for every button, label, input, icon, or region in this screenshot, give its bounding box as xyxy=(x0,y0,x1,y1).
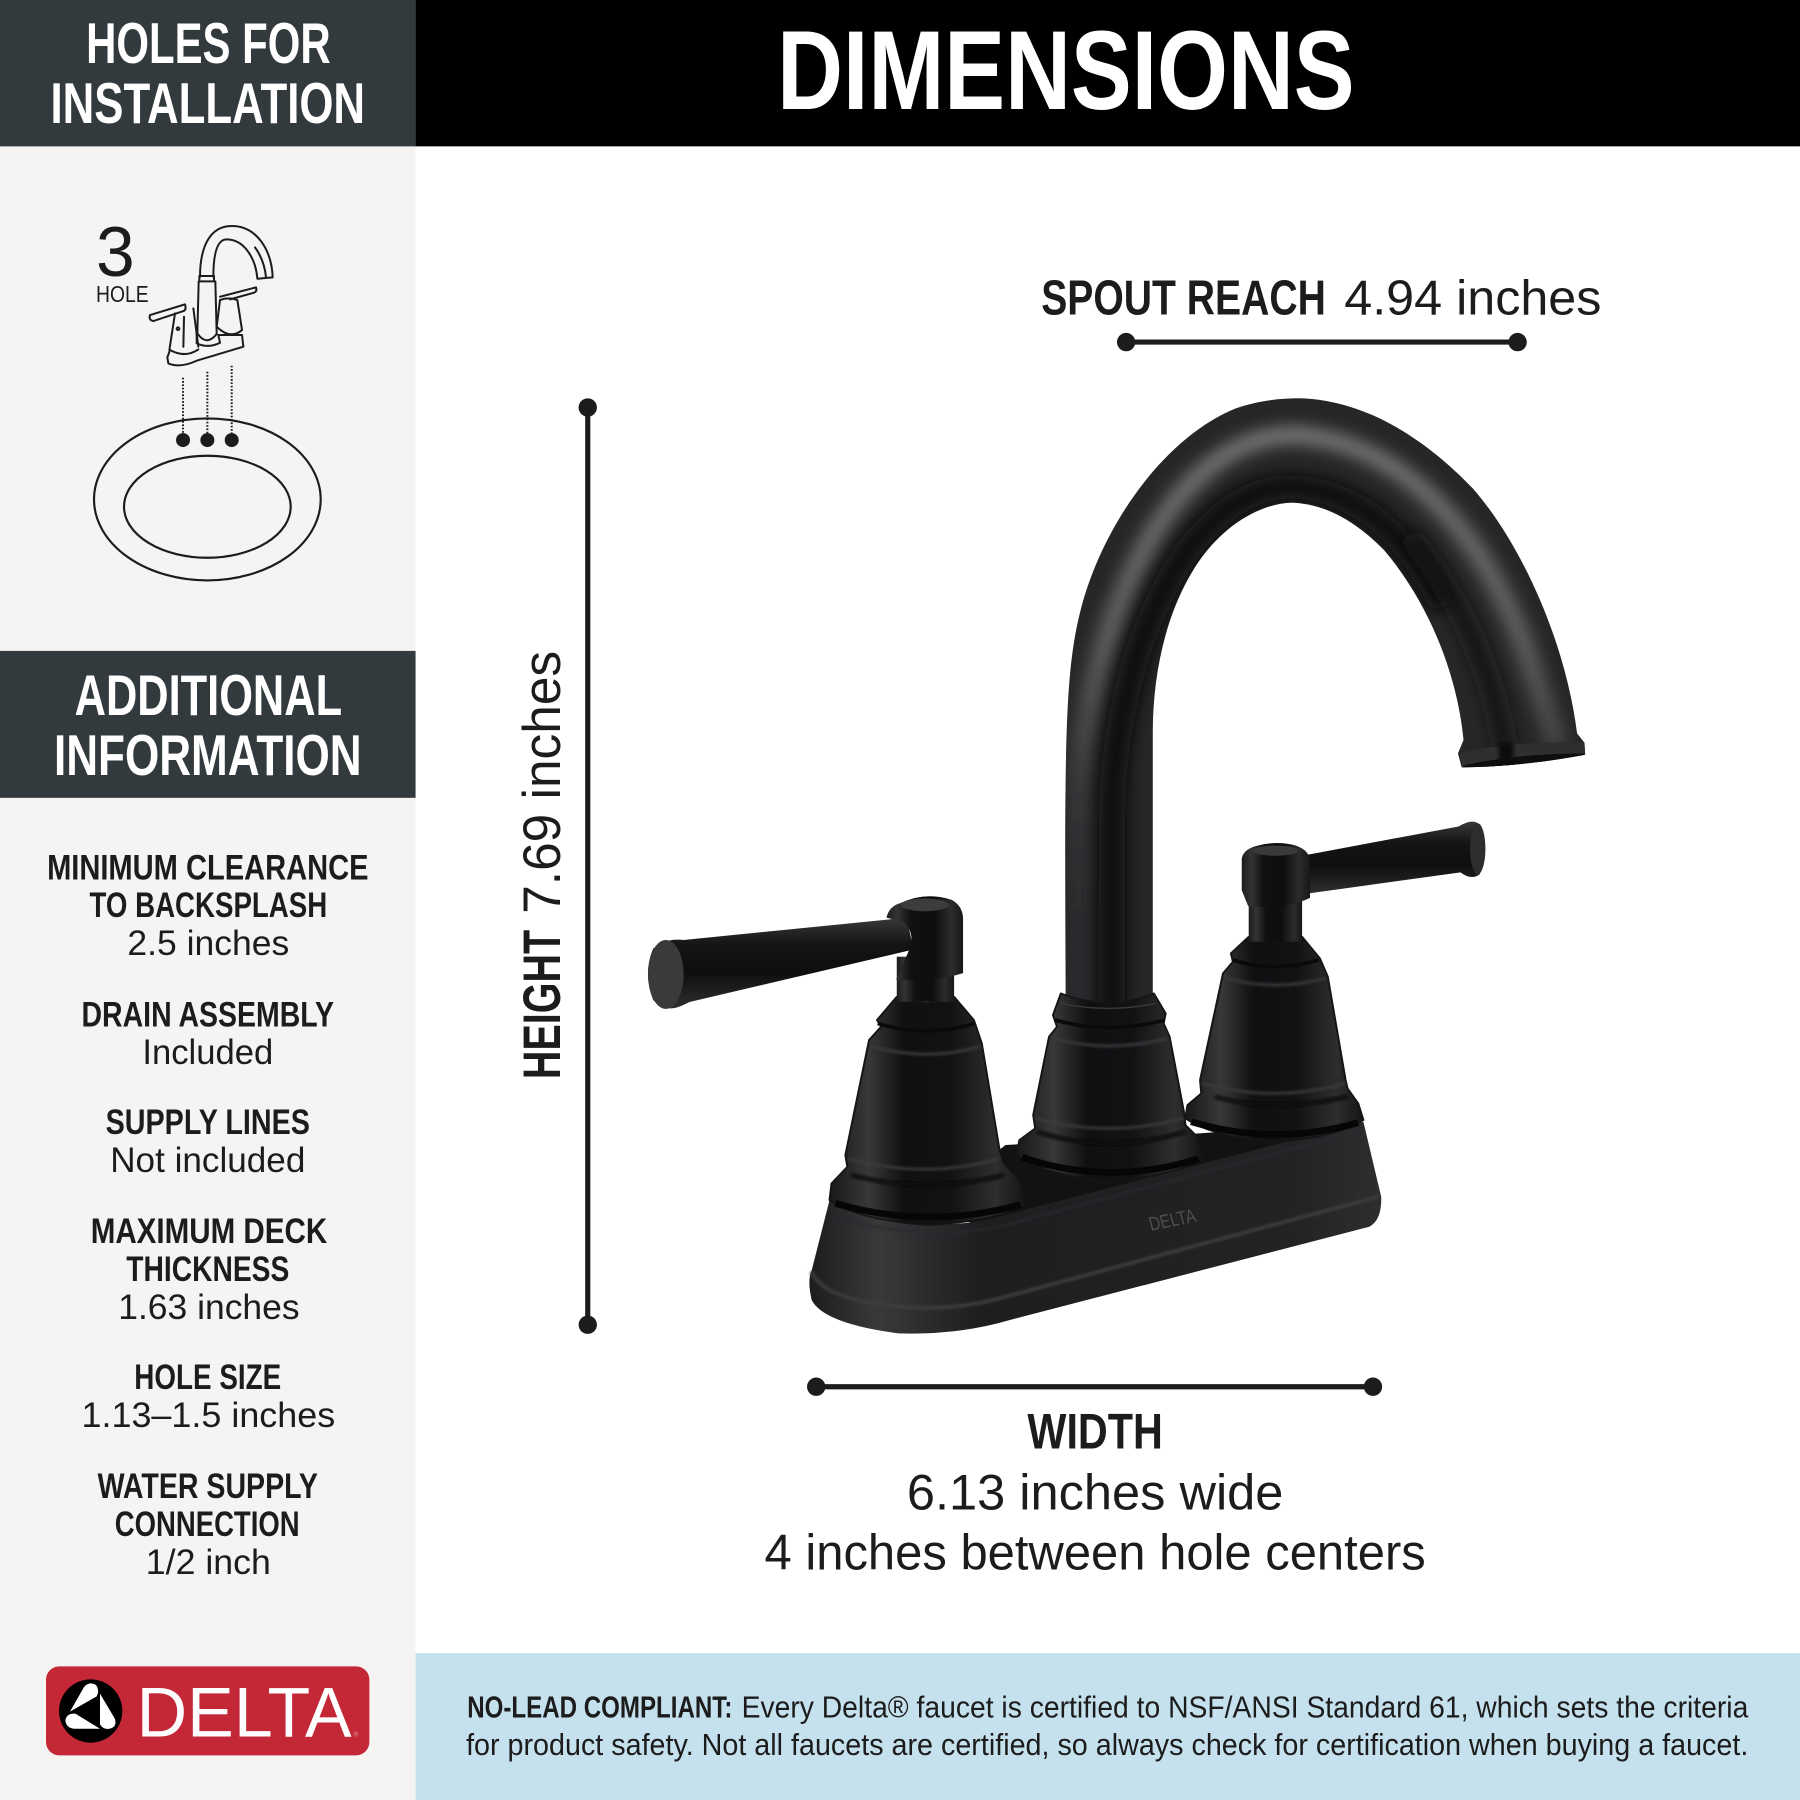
spec: water supply connection: CONNECTION xyxy=(115,1504,300,1544)
spec: supply lines: SUPPLY LINES xyxy=(106,1102,310,1142)
spec: hole size xyxy=(82,1357,335,1435)
spec: minimum clearance: TO BACKSPLASH xyxy=(90,885,327,925)
spec: maximum deck thickness xyxy=(91,1211,327,1327)
spec: minimum clearance: MINIMUM CLEARANCE xyxy=(47,847,368,887)
label: 3 hole: HOLE xyxy=(96,281,149,307)
callout: no-lead compliant xyxy=(416,1653,1800,1800)
label: width: 6.13 inches wide xyxy=(907,1464,1283,1521)
faucet: spout arc and post xyxy=(1065,398,1585,1013)
spec: hole size: HOLE SIZE xyxy=(134,1357,281,1397)
logo: delta: DELTA xyxy=(137,1673,352,1752)
logo: delta: ® xyxy=(353,1730,358,1738)
faucet: left bell xyxy=(830,957,1025,1225)
spec: maximum deck thickness: 1.63 inches xyxy=(118,1287,300,1327)
spec: maximum deck thickness: MAXIMUM DECK xyxy=(91,1211,327,1251)
heading: holes for installation: INSTALLATION xyxy=(51,72,365,136)
faucet: deck plate xyxy=(809,1122,1381,1334)
panel: left sidebar xyxy=(0,0,416,1800)
spec: water supply connection: 1/2 inch xyxy=(146,1542,271,1582)
arrow: width dimension line xyxy=(807,1378,1382,1396)
faucet: right handle xyxy=(1242,822,1485,907)
spec: drain assembly: DRAIN ASSEMBLY xyxy=(82,994,334,1034)
title band: dimensions xyxy=(416,0,1800,146)
faucet: right bell xyxy=(1185,900,1363,1142)
spec: hole size: 1.13–1.5 inches xyxy=(82,1395,335,1435)
spec: supply lines: Not included xyxy=(110,1140,305,1180)
title: DIMENSIONS xyxy=(777,7,1355,133)
icon: dotted guide lines xyxy=(183,366,232,433)
icon: sink basin xyxy=(94,418,321,580)
heading: holes for installation: HOLES FOR xyxy=(86,12,331,76)
spec: water supply connection xyxy=(98,1466,318,1582)
spec: minimum clearance: 2.5 inches xyxy=(127,923,289,963)
faucet: deck plate: DELTA xyxy=(1147,1206,1199,1235)
spec: maximum deck thickness: THICKNESS xyxy=(126,1249,289,1289)
faucet: left handle xyxy=(648,896,963,1009)
diagram: 3 hole faucet and sink xyxy=(94,212,321,580)
heading: holes for installation xyxy=(0,0,416,146)
label: height xyxy=(513,651,572,1079)
label: width xyxy=(765,1403,1426,1580)
spec: drain assembly xyxy=(82,994,334,1072)
logo: delta xyxy=(46,1666,369,1755)
arrow: spout reach dimension line xyxy=(1117,333,1527,351)
icon: faucet line drawing xyxy=(150,226,273,365)
spec: water supply connection: WATER SUPPLY xyxy=(98,1466,318,1506)
arrow: height dimension line xyxy=(579,398,597,1334)
label: height: 7.69 inches xyxy=(513,651,572,914)
spec: drain assembly: Included xyxy=(142,1032,273,1072)
callout: no-lead compliant: NO-LEAD COMPLIANT: xyxy=(467,1689,732,1724)
label: width: WIDTH xyxy=(1027,1403,1163,1460)
label: width: 4 inches between hole centers xyxy=(765,1523,1426,1580)
label: spout reach: SPOUT REACH xyxy=(1041,271,1326,326)
heading: additional information: ADDITIONAL xyxy=(75,664,342,728)
faucet: center bell base xyxy=(1017,993,1202,1182)
label: height: HEIGHT xyxy=(513,930,572,1079)
label: spout reach: 4.94 inches xyxy=(1344,271,1601,326)
spec: minimum clearance xyxy=(47,847,368,963)
spec: supply lines xyxy=(106,1102,310,1180)
label: 3 hole: 3 xyxy=(96,212,135,291)
heading: additional information xyxy=(0,651,416,798)
faucet photo: matte black faucet xyxy=(648,398,1585,1334)
label: 3 hole xyxy=(96,212,149,307)
heading: additional information: INFORMATION xyxy=(54,724,362,788)
label: spout reach xyxy=(1041,271,1601,326)
faucet: base assembly xyxy=(809,900,1381,1334)
